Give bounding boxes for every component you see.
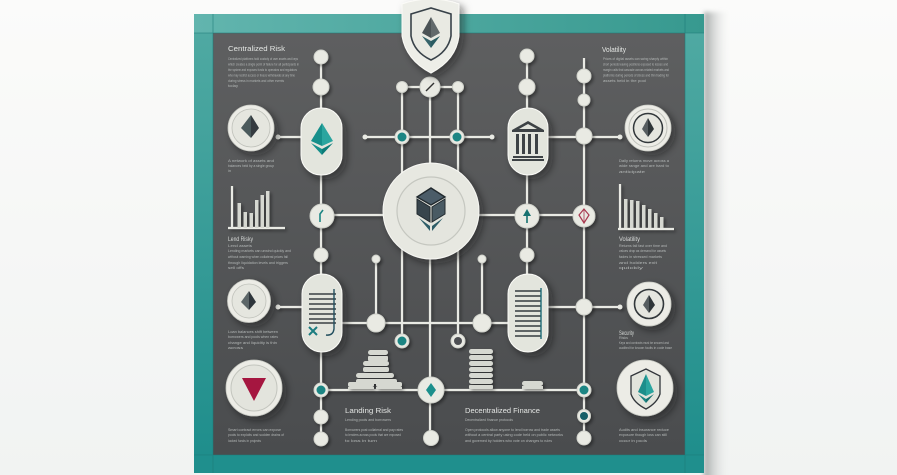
text: mid left caption: borrowers and pools when rates (228, 335, 278, 339)
heading: decentralized finance: Decentralized Finance (465, 406, 540, 415)
shield emblem (402, 0, 459, 73)
text: centralized risk body: which creates a single point of failure for all participants in (228, 62, 299, 66)
text: mid left caption: change and liquidity is thin (228, 341, 277, 345)
board shadow (704, 12, 730, 475)
text: warning caption: locked funds in projects (228, 439, 261, 443)
text: warning caption: Smart contract errors can expose (228, 428, 281, 432)
disc: teal shield (617, 360, 673, 416)
central disc (383, 163, 479, 259)
text: lend body: Lending markets can unwind quickly and (228, 249, 291, 253)
frame seams (194, 14, 704, 473)
pill: ethereum (301, 108, 342, 175)
text: warning caption (228, 428, 284, 443)
icon: list (515, 288, 541, 339)
icon: ethereum (642, 118, 654, 137)
text: decentralized finance body (465, 418, 563, 443)
board centre (213, 33, 685, 455)
frame: top (194, 14, 704, 33)
icon: ethereum (422, 17, 440, 48)
pill: ledger left (302, 274, 342, 352)
text: volatility label body: Returns fall fast over time and (619, 244, 667, 248)
heading: volatility: Volatility (602, 45, 626, 54)
text: centralized risk body (228, 57, 299, 88)
pill: ledger right (508, 274, 548, 352)
text: decentralized finance body: Decentralized finance protocols (465, 418, 513, 422)
node: slash (420, 77, 440, 97)
text: centralized risk body: the system and exposes funds to operators and regulators (228, 68, 297, 72)
coin stack: pyramid (348, 350, 402, 389)
text: mid left caption (228, 330, 278, 350)
text: decentralized finance body: Open protocols allow anyone to lend borrow and trade assets (465, 428, 560, 432)
bar chart: rising (228, 186, 285, 228)
heading: lending risk label: Lend Risky (228, 237, 253, 243)
text: security body (619, 336, 672, 350)
text: centralized risk body: during stress in markets and other events (228, 79, 284, 83)
text: lending risk body: Lending pools and borrowers (345, 418, 391, 422)
text: decentralized finance body: without a central party using code held on public networks (465, 433, 563, 437)
text: shield caption: exposure though loss can still (619, 433, 667, 437)
text: volatility label body: and holders exit (619, 261, 657, 265)
disc: mid left ethereum (228, 280, 270, 322)
heading: security: Security (619, 331, 634, 337)
disc: red warning triangle (226, 360, 282, 416)
icon: bank (512, 121, 544, 161)
connector nodes (313, 49, 592, 446)
icon: ethereum (643, 295, 655, 313)
heading: centralized risk: Centralized Risk (228, 44, 285, 53)
coin stack: tall (469, 349, 493, 389)
text: volatility body: margin calls that cascade across related markets and (603, 68, 669, 72)
icon: ethereum (241, 115, 259, 138)
text: centralized risk body: today (228, 84, 238, 88)
text: volatility body (603, 57, 670, 83)
text: volatility label body: fades in stressed markets (619, 255, 662, 259)
text: centralized risk body: who may restrict access or freeze withdrawals at any time (228, 74, 295, 78)
text: security body: Keys and contracts must be secured and (619, 341, 669, 345)
icon: shield (631, 369, 660, 409)
text: volatility caption: anticipate (619, 170, 645, 174)
text: volatility caption (619, 159, 669, 174)
text: disc caption: in (228, 169, 231, 173)
disc: top left ethereum (228, 105, 274, 151)
node: teal hook (310, 204, 334, 228)
text: lend body: without warning when collateral prices fall (228, 255, 288, 259)
frame: bottom (194, 455, 704, 473)
text: lending risk body: to loss in turn (345, 439, 377, 443)
text: lend body (228, 244, 291, 270)
text blocks (228, 44, 672, 443)
heading: volatility label: Volatility (619, 237, 640, 243)
node: teal diamond (418, 377, 444, 403)
text: centralized risk body: Centralized platforms hold custody of user assets and keys (228, 57, 298, 61)
node: up arrow (515, 204, 539, 228)
text: volatility body: platforms during periods of stress and thin trading for (603, 74, 670, 78)
text: shield caption: Audits and insurance reduce (619, 428, 669, 432)
heading: lending risk: Landing Risk (345, 406, 391, 415)
teal ring nodes (314, 130, 591, 422)
panel: board (194, 14, 704, 473)
text: disc caption (228, 159, 274, 173)
text: shield caption: occur in pools (619, 439, 647, 443)
text: mid left caption: across (228, 346, 243, 350)
text: lending risk body: Borrowers post collateral and pay rates (345, 428, 403, 432)
text: disc caption: A network of assets and (228, 159, 274, 163)
text: lending risk body: to lenders across pools that are exposed (345, 433, 401, 437)
frame: right (685, 33, 704, 455)
text: security body: Risks (619, 336, 628, 340)
icon: ethereum (241, 291, 256, 310)
text: decentralized finance body: and governed by holders who vote on changes to rules (465, 439, 552, 443)
text: lend body: Lend assets (228, 244, 252, 248)
bar chart: falling (618, 184, 674, 229)
node: red mark (573, 205, 595, 227)
text: lending risk body (345, 418, 403, 443)
text: volatility body: assets held in the pool (603, 79, 646, 83)
disc: top right ethereum (625, 105, 671, 151)
text: mid left caption: Loan balances shift between (228, 330, 278, 334)
coin stack: small (522, 381, 543, 389)
network connector lines (276, 56, 622, 439)
text: volatility label body: quickly (619, 266, 643, 270)
text: shield caption (619, 428, 669, 443)
text: volatility body: short periods leaving positions exposed to losses and (603, 62, 668, 66)
text: lend body: sell offs (228, 266, 244, 270)
disc: mid right ethereum (627, 282, 671, 326)
icon: red triangle (242, 378, 266, 401)
frame: left (194, 33, 213, 455)
icon: list with hook (309, 289, 336, 335)
text: warning caption: pools to exploits and sudden drains of (228, 433, 284, 437)
icon: teal ethereum (311, 123, 333, 155)
text: lend body: through liquidation levels and triggers (228, 261, 288, 265)
text: volatility label body (619, 244, 667, 270)
text: volatility label body: values drop as demand for assets (619, 249, 666, 253)
text: volatility caption: wide range and are hard to (619, 164, 669, 168)
text: volatility caption: Daily returns move across a (619, 159, 669, 163)
icon: cube (417, 188, 445, 231)
text: security body: audited for known faults in code base (619, 346, 672, 350)
pill: bank (508, 108, 548, 175)
text: disc caption: balances held by a single group (228, 164, 274, 168)
text: volatility body: Prices of digital assets can swing sharply within (603, 57, 668, 61)
